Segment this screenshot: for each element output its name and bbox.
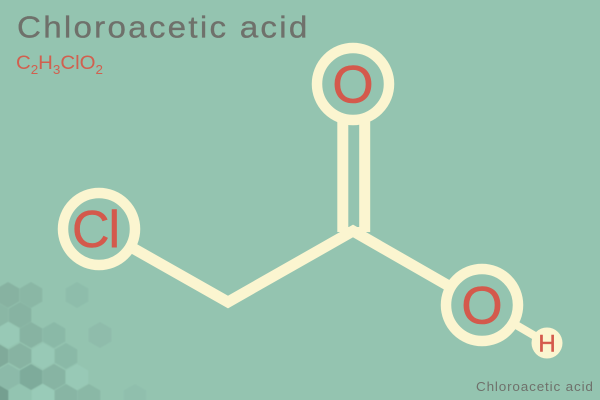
chemical formula: 2 bbox=[31, 63, 38, 77]
bonds bbox=[99, 110, 547, 343]
atom: oxygen double bonded: O bbox=[332, 56, 374, 114]
chemical formula: H bbox=[38, 53, 53, 74]
atom: hydrogen bbox=[532, 328, 562, 358]
chemical formula: 2 bbox=[96, 63, 103, 77]
chemical formula: ClO bbox=[60, 53, 96, 74]
caption: Chloroacetic acid bbox=[476, 379, 594, 394]
atom: oxygen double bonded bbox=[317, 48, 389, 120]
atom: hydroxyl oxygen: O bbox=[461, 276, 503, 336]
atom: hydroxyl oxygen bbox=[446, 269, 518, 341]
atom: chlorine bbox=[63, 193, 135, 265]
atom: hydrogen: H bbox=[538, 330, 556, 358]
chemical formula: C bbox=[16, 53, 30, 74]
molecule structure bbox=[63, 48, 562, 358]
chemical formula: 3 bbox=[53, 63, 60, 77]
hexagon pattern bbox=[0, 282, 146, 400]
title: Chloroacetic acid bbox=[17, 9, 310, 44]
atom: chlorine: Cl bbox=[72, 201, 120, 259]
